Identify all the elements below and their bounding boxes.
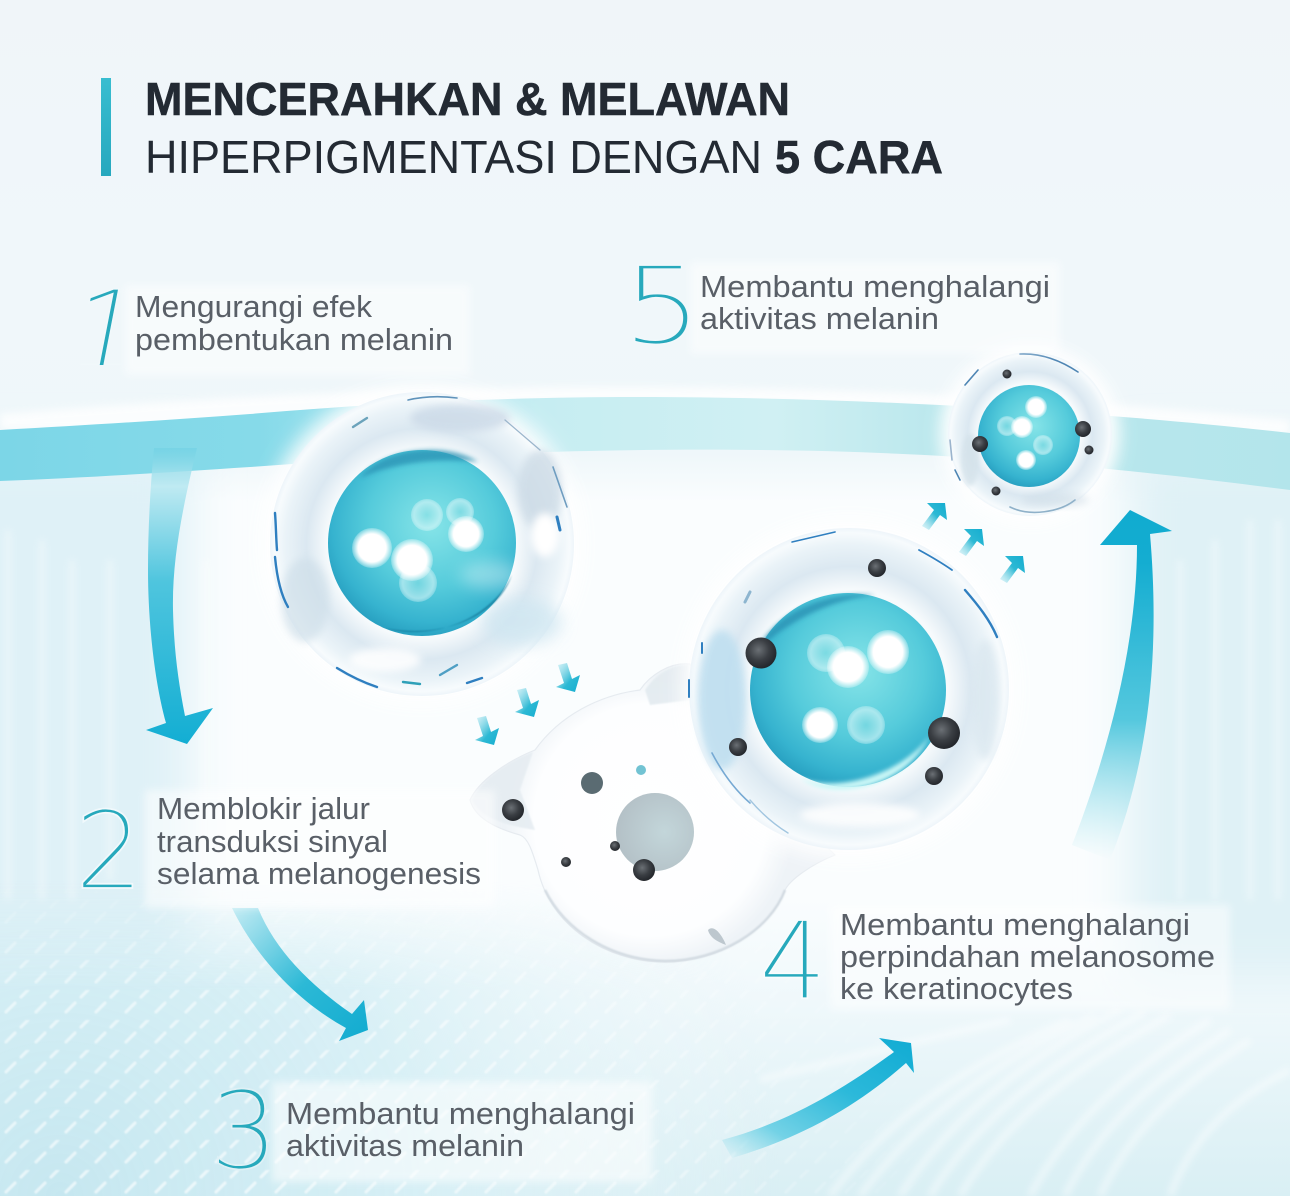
nucleus [978, 385, 1080, 487]
rim highlights [950, 354, 1078, 512]
arrow: step 4 to 5 [1072, 510, 1172, 860]
clear cell with melanin [470, 664, 835, 962]
bubble cell 2 [681, 519, 1017, 859]
number 4: 4 [759, 900, 827, 1024]
melanin dots [972, 370, 1094, 496]
arrow: step 3 to 4 [722, 1038, 914, 1158]
title line 2: 5 CARA [775, 131, 943, 183]
step 5 text: aktivitas melanin [700, 301, 939, 336]
step 2 text: transduksi sinyal [157, 824, 388, 859]
melanin dots [729, 559, 960, 785]
step 3 text: aktivitas melanin [286, 1128, 524, 1163]
title line 2: HIPERPIGMENTASI DENGAN [145, 131, 762, 183]
step 5 text: Membantu menghalangi [700, 269, 1050, 304]
step 2 text: Memblokir jalur [157, 791, 370, 826]
step 4 [759, 900, 1230, 1024]
nucleus [750, 593, 946, 790]
small arrows into clear cell [475, 663, 580, 745]
step 5 [622, 243, 1060, 369]
arrow: step 2 to 3 [232, 908, 368, 1041]
title block [101, 73, 943, 183]
rim highlights [689, 532, 997, 833]
step 4 text: Membantu menghalangi [840, 907, 1190, 942]
step 3 text [286, 1096, 635, 1163]
nucleus [328, 450, 520, 636]
step 1 text [135, 289, 453, 357]
arrow: step 1 to 2 [146, 448, 213, 744]
step 1 text: pembentukan melanin [135, 322, 453, 357]
number 2: 2 [75, 790, 143, 914]
step 2 [75, 790, 495, 914]
step 3 text: Membantu menghalangi [286, 1096, 635, 1131]
background [0, 471, 1290, 1196]
cell nucleus [616, 793, 694, 871]
small arrows toward bubble cell 3 [922, 503, 1025, 583]
bubble cell 3 [940, 344, 1120, 524]
melanin dots [502, 765, 655, 881]
step 4 text [840, 907, 1215, 1006]
step 2 text [157, 791, 481, 891]
step 5 text [700, 269, 1050, 336]
title accent bar [101, 78, 111, 176]
bubble cell 1 [262, 384, 582, 704]
step 1 [90, 290, 451, 365]
number 1: 1 [59, 268, 154, 396]
number 5: 5 [622, 243, 702, 369]
step 1 text: Mengurangi efek [135, 289, 373, 324]
step 3 [210, 1070, 652, 1194]
rim highlights [275, 397, 567, 687]
step 2 text: selama melanogenesis [157, 856, 481, 891]
title line 1: MENCERAHKAN & MELAWAN [145, 73, 790, 125]
wave band [0, 387, 1290, 490]
step 4 text: perpindahan melanosome [840, 939, 1215, 974]
step 4 text: ke keratinocytes [840, 971, 1073, 1006]
number 3: 3 [210, 1070, 278, 1194]
